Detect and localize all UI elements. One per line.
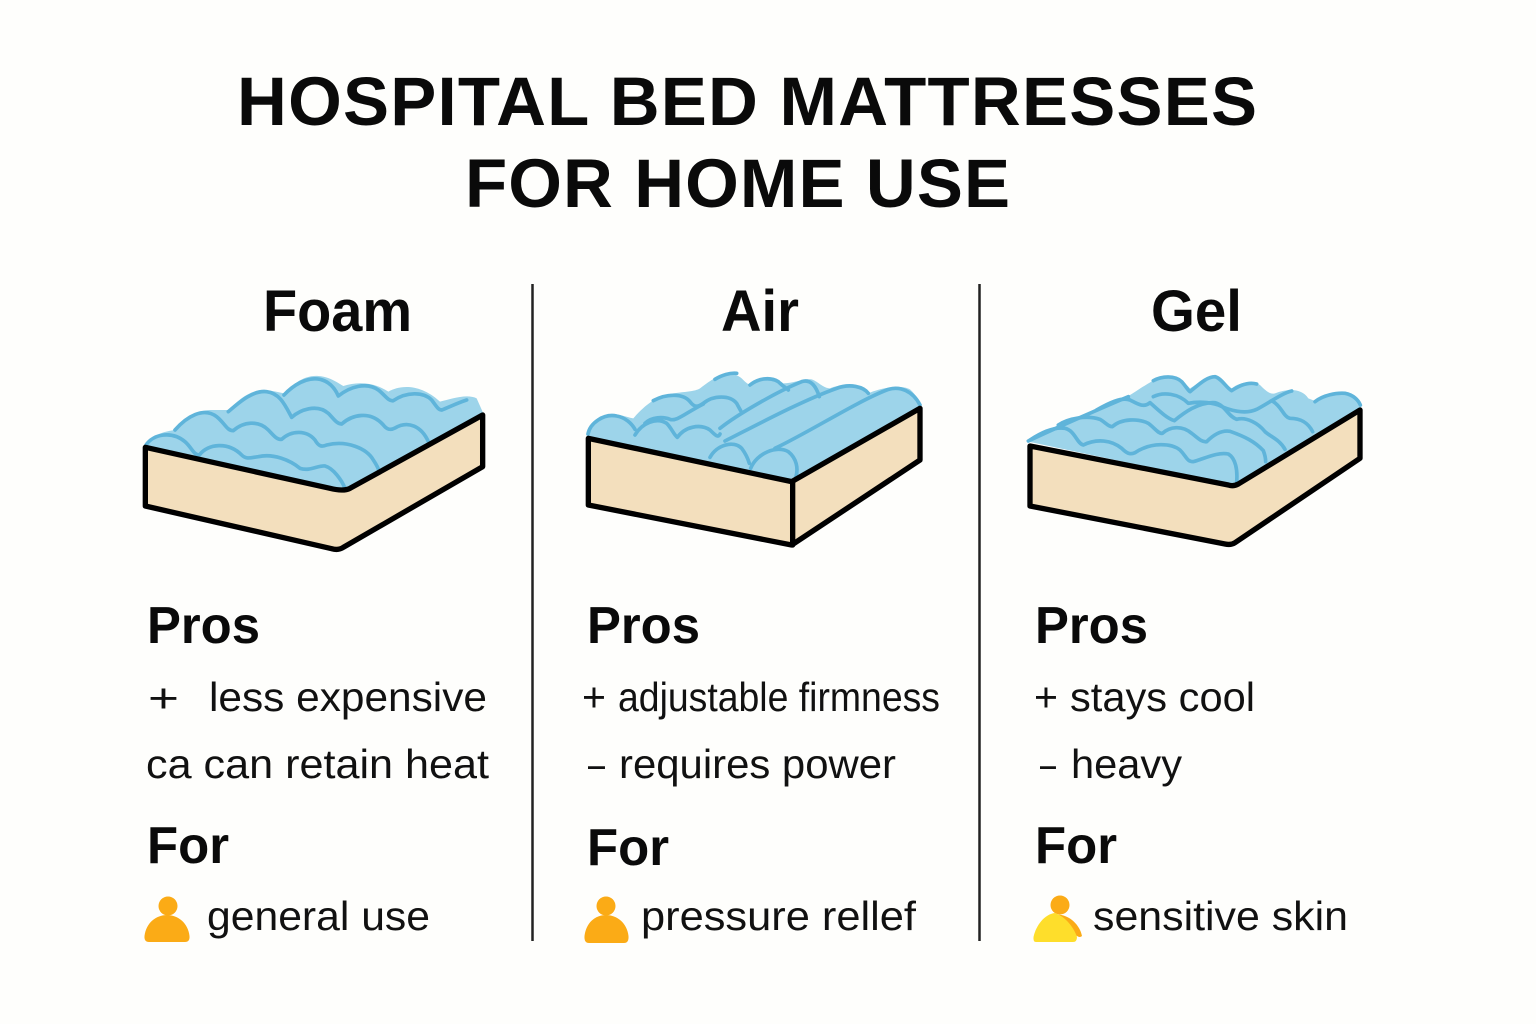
pro item: foam: + xyxy=(148,675,179,721)
use case: gel: sensitive skin xyxy=(1093,893,1348,939)
con item: air: requires power xyxy=(619,741,896,787)
illustration: foam mattress xyxy=(145,376,483,550)
pro item: air: + xyxy=(582,674,606,720)
icon: person xyxy=(1033,896,1082,942)
pros heading: gel: Pros xyxy=(1035,597,1148,655)
for heading: air: For xyxy=(587,819,669,877)
title: HOSPITAL BED MATTRESSES xyxy=(237,63,1257,140)
illustration: air mattress xyxy=(587,373,921,545)
heading: gel: Gel xyxy=(1151,279,1242,344)
for heading: gel: For xyxy=(1035,817,1117,875)
pros heading: foam: Pros xyxy=(147,597,260,655)
icon: person xyxy=(584,896,629,943)
for heading: foam: For xyxy=(147,817,229,875)
heading: foam: Foam xyxy=(263,279,412,344)
pro item: foam: less expensive xyxy=(209,674,487,720)
pros heading: air: Pros xyxy=(587,597,700,655)
con item: gel: heavy xyxy=(1071,741,1182,787)
title: FOR HOME USE xyxy=(465,145,1010,222)
heading: air: Air xyxy=(721,279,799,344)
con item: air: – xyxy=(588,741,605,787)
title xyxy=(237,63,1257,222)
con item: foam: ca can retain heat xyxy=(146,741,490,787)
use case: air: pressure rellef xyxy=(641,893,917,939)
pro item: air: adjustable firmness xyxy=(618,674,940,720)
illustration: gel mattress xyxy=(1028,376,1361,545)
panel: foam xyxy=(144,279,490,942)
icon: person xyxy=(144,896,190,942)
pro item: gel: stays cool xyxy=(1070,674,1255,720)
use case: foam: general use xyxy=(207,893,430,939)
panel: gel xyxy=(1028,279,1361,942)
con item: gel: – xyxy=(1040,741,1056,787)
panel: air xyxy=(582,279,940,943)
pro item: gel: + xyxy=(1034,674,1058,720)
